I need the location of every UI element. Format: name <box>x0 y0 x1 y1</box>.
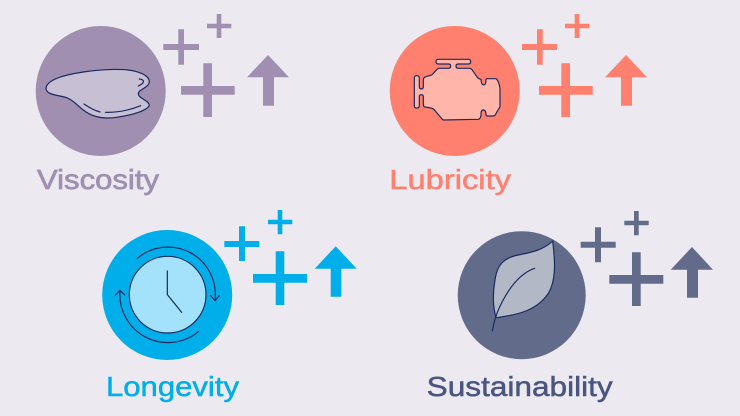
icon: leaf <box>492 241 555 331</box>
label: viscosity: Viscosity <box>37 164 159 195</box>
arrow: up <box>605 55 647 106</box>
icon: fluid blob <box>46 69 149 118</box>
icon circle: viscosity <box>36 26 166 156</box>
plus: large <box>609 252 663 306</box>
plus: small <box>268 210 292 234</box>
plus: medium <box>581 227 616 262</box>
plus: large <box>181 63 235 117</box>
plus: small <box>207 14 231 38</box>
panel: longevity <box>102 210 357 402</box>
icon circle: lubricity <box>390 26 520 156</box>
icon circle: longevity <box>102 230 232 360</box>
arrow: up <box>247 55 289 106</box>
icon: engine <box>414 59 500 120</box>
arrow: up <box>315 246 357 297</box>
label: lubricity: Lubricity <box>389 164 511 195</box>
arrow: up <box>671 247 713 298</box>
icon circle: sustainability <box>458 231 586 359</box>
plus: small <box>565 14 589 38</box>
plus: large <box>253 251 307 305</box>
label: longevity: Longevity <box>106 371 239 402</box>
plus: medium <box>522 29 557 65</box>
icon: clock with cycle arrows <box>115 247 219 343</box>
plus: medium <box>163 29 199 65</box>
label: sustainability: Sustainability <box>427 371 613 402</box>
panel: sustainability <box>427 211 713 402</box>
plus: large <box>539 63 593 117</box>
plus: small <box>624 211 649 235</box>
plus: medium <box>224 226 259 261</box>
panel: lubricity <box>389 14 647 195</box>
panel: viscosity <box>36 14 289 195</box>
